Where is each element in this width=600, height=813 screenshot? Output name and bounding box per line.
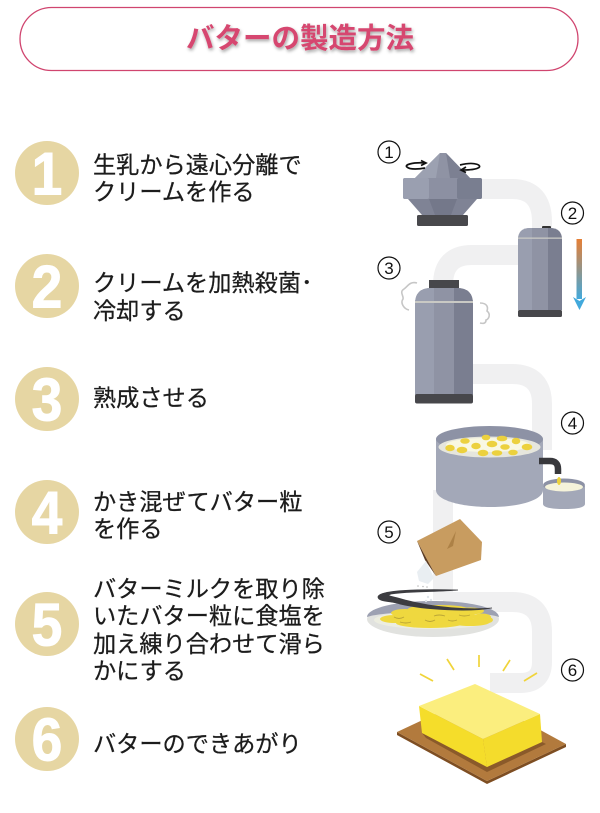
- machine 4: churn: [436, 426, 585, 509]
- step 6: 6: [32, 707, 62, 774]
- step 6: [15, 707, 302, 774]
- step 2: 2: [32, 254, 62, 321]
- step 1: [15, 141, 302, 208]
- title banner: [20, 8, 578, 70]
- step 4: を作る: [93, 516, 163, 542]
- label ⑥: [562, 659, 584, 681]
- shine rays: [420, 655, 537, 681]
- step 5: [15, 576, 325, 684]
- step 4: かき混ぜてバター粒: [93, 489, 302, 515]
- step 5: いたバター粒に食塩を: [93, 603, 325, 629]
- step 5: バターミルクを取り除: [93, 576, 325, 602]
- butter shadow: [422, 733, 546, 772]
- step 4: 4: [32, 480, 62, 547]
- step 3: 熟成させる: [93, 385, 209, 411]
- label ①: 1: [384, 143, 394, 162]
- step 1: 1: [32, 141, 62, 208]
- label ③: [378, 257, 400, 279]
- arrow: cooling: [573, 239, 586, 310]
- label ④: 4: [568, 414, 577, 433]
- spout: [539, 461, 558, 474]
- step 5: かにする: [93, 658, 186, 684]
- step 4: [15, 480, 302, 547]
- machine 3: ripening tank: [402, 280, 489, 404]
- connecting pipes: [443, 189, 542, 683]
- label ②: 2: [568, 204, 577, 223]
- steam wisps: [402, 283, 489, 323]
- step 2: [15, 254, 313, 324]
- label ⑤: [378, 521, 400, 543]
- label ④: [562, 412, 584, 434]
- step 5: 5: [32, 592, 62, 659]
- step 2: クリームを加熱殺菌･: [93, 270, 313, 296]
- label ②: [562, 202, 584, 224]
- machine 5: kneading plate: [367, 590, 499, 637]
- salt falling on plate: [425, 596, 432, 602]
- step 1: 生乳から遠心分離で: [93, 152, 302, 178]
- butter grains: [380, 605, 493, 628]
- step 3: 3: [32, 367, 62, 434]
- grain shading: [394, 615, 470, 623]
- label ⑤: 5: [384, 523, 394, 542]
- salt: [417, 561, 434, 588]
- step 1: クリームを作る: [93, 179, 255, 205]
- stirring swirl: [378, 590, 492, 610]
- rotation arrows: [406, 160, 480, 172]
- machine 5: salt bag: [417, 519, 482, 588]
- step 6: バターのできあがり: [93, 731, 302, 757]
- machine 1: centrifuge: [403, 153, 482, 226]
- title text: バターの製造方法: [186, 23, 414, 55]
- label ③: 3: [384, 259, 394, 278]
- label ⑥: 6: [568, 661, 577, 680]
- step 2: 冷却する: [93, 298, 186, 324]
- machine 2: cooling tank: [518, 226, 562, 317]
- step 3: [15, 367, 209, 434]
- small receiving pot: [543, 477, 585, 509]
- butter grains: [446, 436, 532, 456]
- step 5: 加え練り合わせて滑ら: [93, 631, 325, 657]
- machine 6: butter on board: [397, 655, 566, 784]
- label ①: [378, 141, 400, 163]
